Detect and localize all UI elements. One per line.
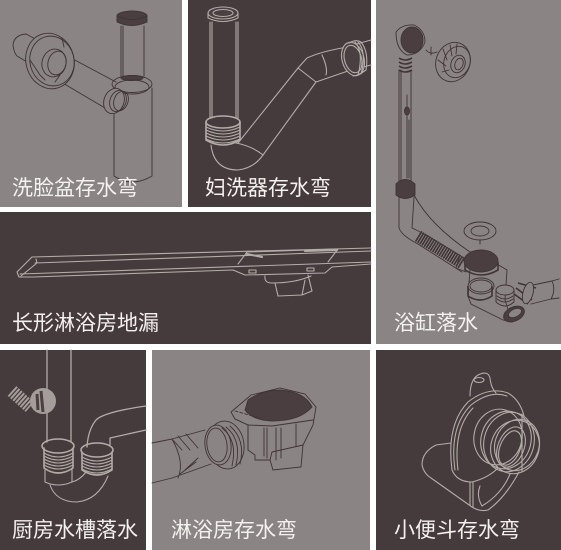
panel: washbasin trap <box>0 0 182 207</box>
icon: bottle trap <box>13 11 152 182</box>
panel: bidet trap <box>188 0 371 207</box>
icon: P-trap <box>206 7 371 170</box>
panel: urinal trap <box>376 350 561 550</box>
panel: shower trap <box>152 350 370 550</box>
label: bidet trap: 妇洗器存水弯 <box>205 177 331 200</box>
label: linear shower drain: 长形淋浴房地漏 <box>12 312 159 335</box>
icon: bathtub waste and overflow <box>396 25 559 325</box>
label: bathtub drain: 浴缸落水 <box>394 312 478 335</box>
panel: bathtub drain <box>376 0 561 344</box>
label: kitchen sink drain: 厨房水槽落水 <box>12 519 138 542</box>
label: shower trap: 淋浴房存水弯 <box>171 519 297 542</box>
icon: shower trap <box>152 388 316 483</box>
icon: double sink trap <box>12 350 146 502</box>
panel: kitchen sink drain <box>0 350 146 550</box>
label: washbasin trap: 洗脸盆存水弯 <box>12 177 138 200</box>
icon: urinal trap <box>422 373 547 511</box>
label: urinal trap: 小便斗存水弯 <box>394 519 520 542</box>
panel: linear shower drain <box>0 212 371 344</box>
icon: linear drain <box>17 248 371 296</box>
